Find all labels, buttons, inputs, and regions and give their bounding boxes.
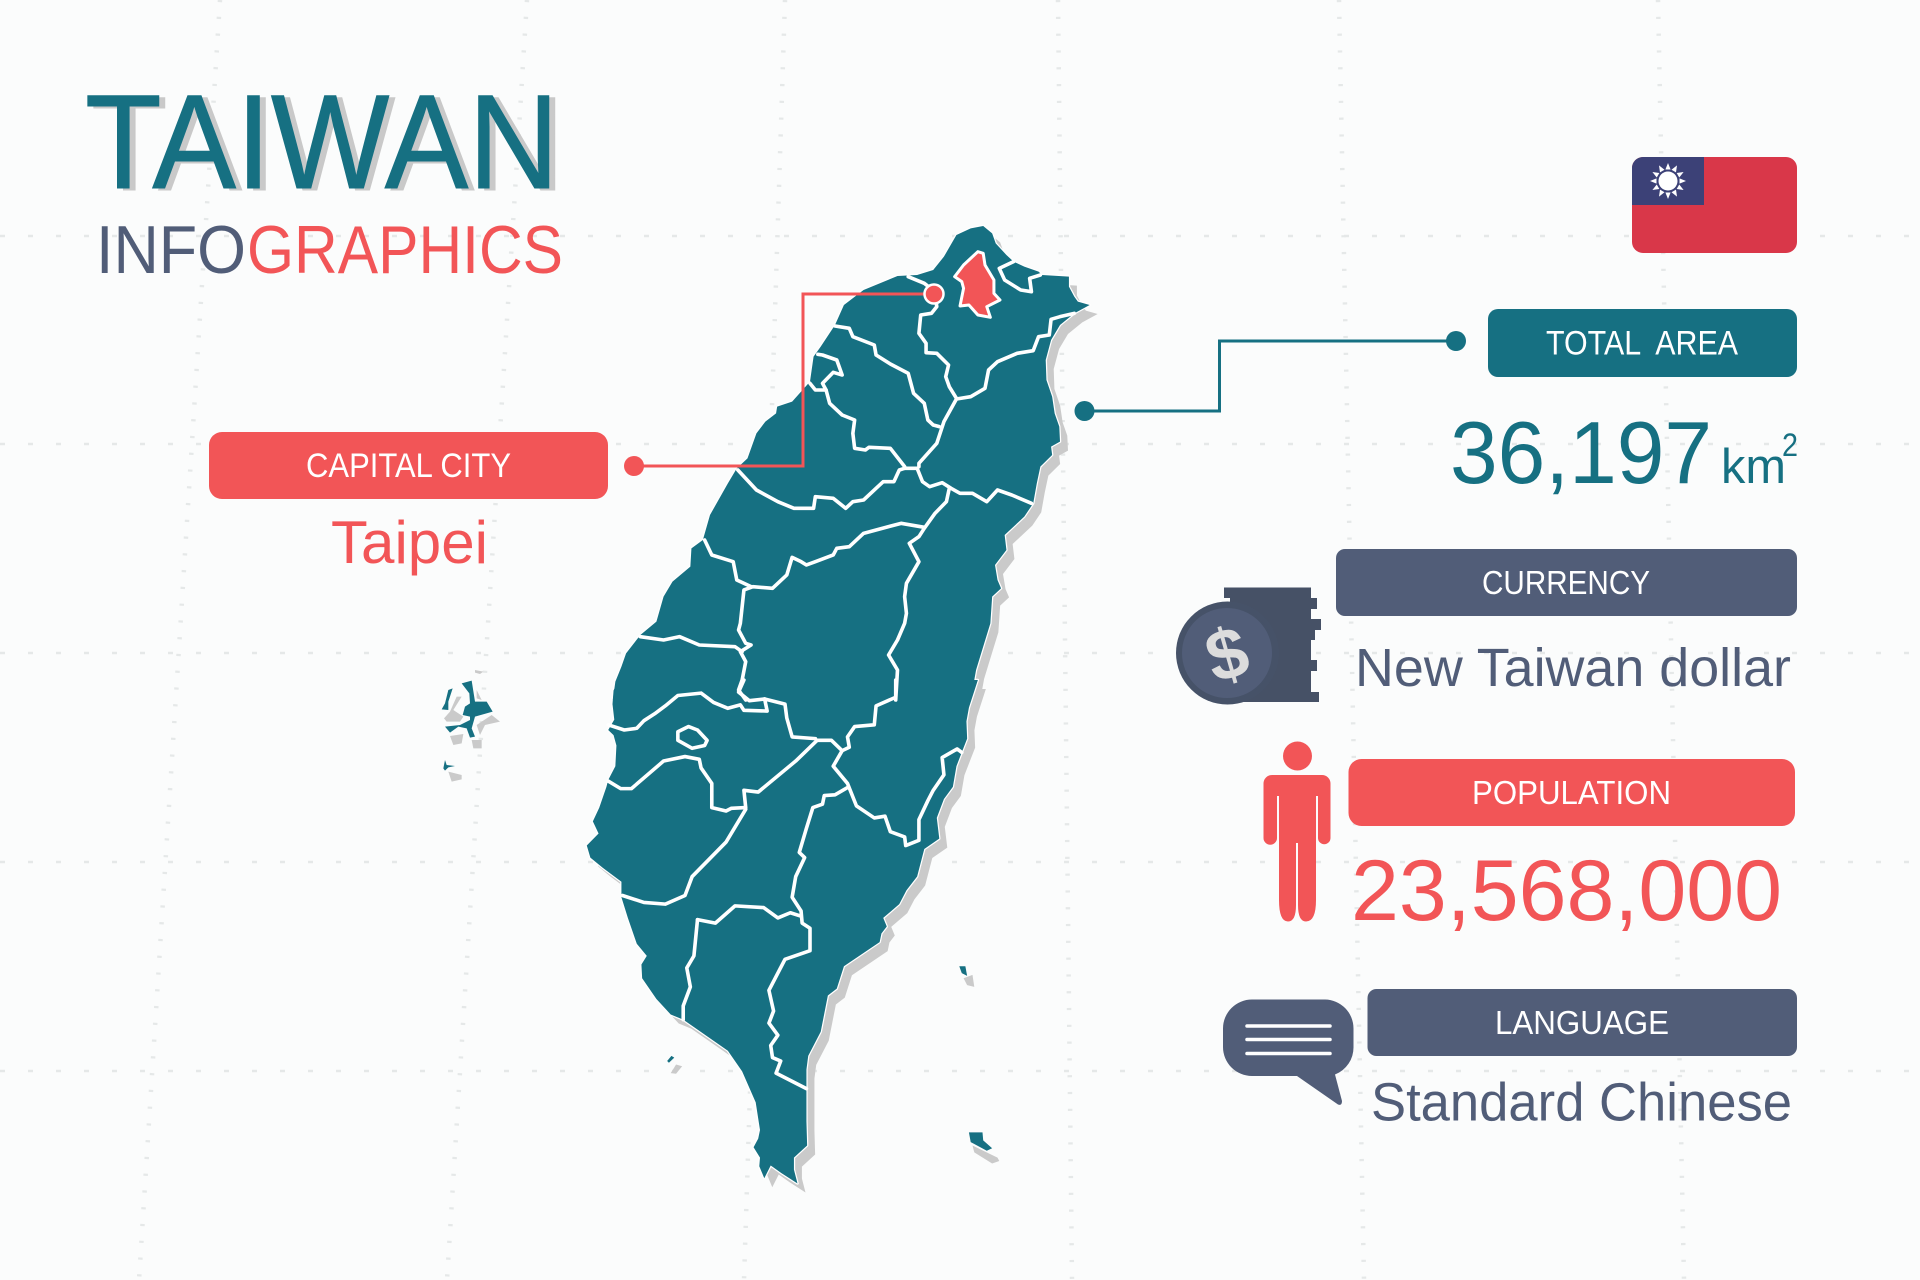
title: TAIWAN <box>91 70 565 219</box>
population label <box>1348 759 1795 826</box>
islands: Penghu <box>442 670 500 782</box>
capital name: Taipei <box>331 509 488 576</box>
population value: 23,568,000 <box>1351 843 1782 939</box>
title: TAIWAN <box>85 68 559 217</box>
islands east and south <box>667 966 999 1163</box>
currency value: New Taiwan dollar <box>1355 638 1791 698</box>
Taipei highlight <box>955 252 1000 317</box>
icon: coins: $ <box>1197 611 1258 699</box>
currency label: CURRENCY <box>1482 564 1650 601</box>
map landmass <box>587 226 1090 1183</box>
subtitle: GRAPHICS <box>247 212 563 288</box>
total area value: 36,197 <box>1450 403 1712 502</box>
map shadow <box>595 235 1098 1192</box>
subtitle <box>96 212 563 288</box>
capital connector line <box>624 284 944 476</box>
icon: person <box>1264 742 1330 922</box>
map: Taiwan <box>442 226 1098 1192</box>
total area label: TOTAL AREA <box>1546 324 1738 362</box>
language label: LANGUAGE <box>1495 1004 1669 1041</box>
population label: POPULATION <box>1472 774 1671 811</box>
total area value: 2 <box>1782 427 1798 463</box>
total area label <box>1488 309 1797 377</box>
icon: speech bubble <box>1223 1000 1354 1105</box>
capital city label: CAPITAL CITY <box>306 447 511 485</box>
county borders south <box>608 680 962 1089</box>
subtitle: INFO <box>96 212 246 288</box>
currency label <box>1336 549 1797 616</box>
language label <box>1368 989 1797 1056</box>
county borders north <box>640 262 1074 700</box>
icon: coins <box>1176 588 1321 704</box>
language value: Standard Chinese <box>1371 1072 1792 1132</box>
total area connector line <box>1074 331 1466 421</box>
capital city label <box>209 432 608 499</box>
total area value: km <box>1721 440 1786 494</box>
flag of Taiwan <box>1632 157 1797 253</box>
